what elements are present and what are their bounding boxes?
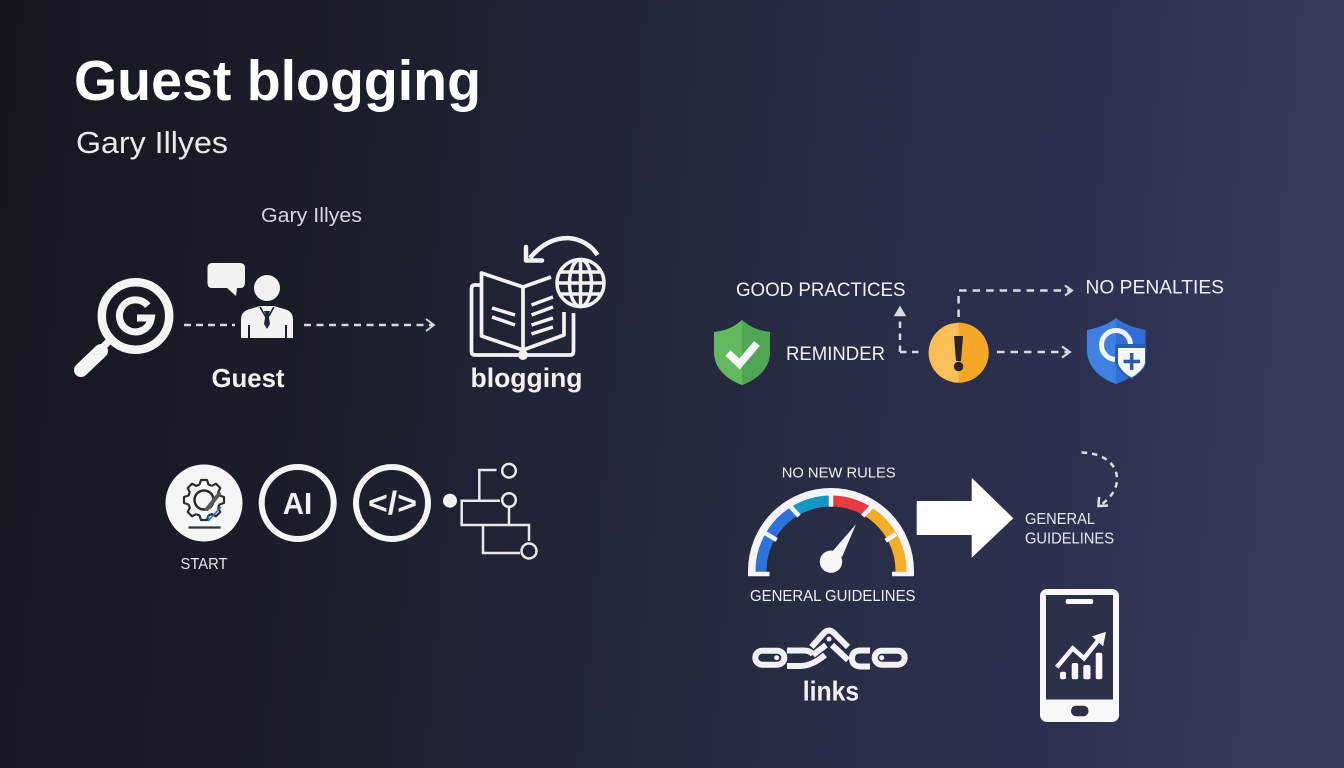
label: REMINDER: REMINDER (786, 344, 885, 365)
icon: alert circle (929, 323, 989, 383)
icon: code circle (356, 467, 428, 539)
icon: open book with globe (472, 238, 604, 360)
arrow: reminder to good practices (896, 308, 922, 352)
arrow: magnifier to guest (184, 324, 235, 326)
arrow: alert to blue shield (997, 346, 1070, 358)
icon: node tree (443, 464, 536, 558)
label: Guest: Guest (212, 363, 285, 393)
label: GENERAL GUIDELINES under gauge: GENERAL GUIDELINES (750, 588, 916, 605)
label: GENERAL GUIDELINES at arrow (1025, 511, 1114, 548)
title: Guest blogging (74, 49, 481, 113)
label: NO PENALTIES: NO PENALTIES (1086, 278, 1224, 298)
icon: guest person with speech bubble (208, 263, 293, 338)
label: GOOD PRACTICES: GOOD PRACTICES (736, 280, 906, 301)
arrow: dashed curved (1082, 452, 1117, 506)
icon: AI circle (262, 467, 334, 539)
label: NO NEW RULES: NO NEW RULES (782, 465, 896, 482)
icon: code circle: </> (368, 485, 417, 521)
label: GENERAL GUIDELINES at arrow: GENERAL (1025, 511, 1095, 528)
label: links: links (803, 676, 859, 707)
author label: Gary Illyes (261, 205, 362, 227)
icon: globe (557, 260, 604, 306)
panel: reminder flow (714, 278, 1224, 385)
icon: phone with growth chart (1040, 589, 1119, 722)
icon: magnifier with G (81, 282, 169, 370)
gauge needle (820, 524, 856, 573)
icon: green shield check (714, 320, 770, 385)
icon: blue shield plus (1087, 318, 1146, 384)
arrow: curved return (526, 238, 598, 260)
label: START: START (180, 556, 228, 573)
arrow: alert up to no penalties (959, 286, 1072, 317)
label: GENERAL GUIDELINES at arrow: GUIDELINES (1025, 531, 1114, 548)
arrow: guest to blogging (304, 319, 434, 331)
panel: guest blogging flow (81, 205, 604, 393)
panel: gauge and guidelines (748, 452, 1119, 722)
icon: AI circle: AI (283, 486, 312, 521)
gauge chart (748, 490, 913, 576)
arrow: large white (917, 478, 1013, 558)
label: blogging: blogging (470, 363, 582, 393)
icon: gear start (166, 464, 242, 542)
subtitle: Gary Illyes (76, 125, 228, 160)
panel: tech icons row (166, 464, 536, 573)
icon: broken chain links (755, 630, 905, 666)
